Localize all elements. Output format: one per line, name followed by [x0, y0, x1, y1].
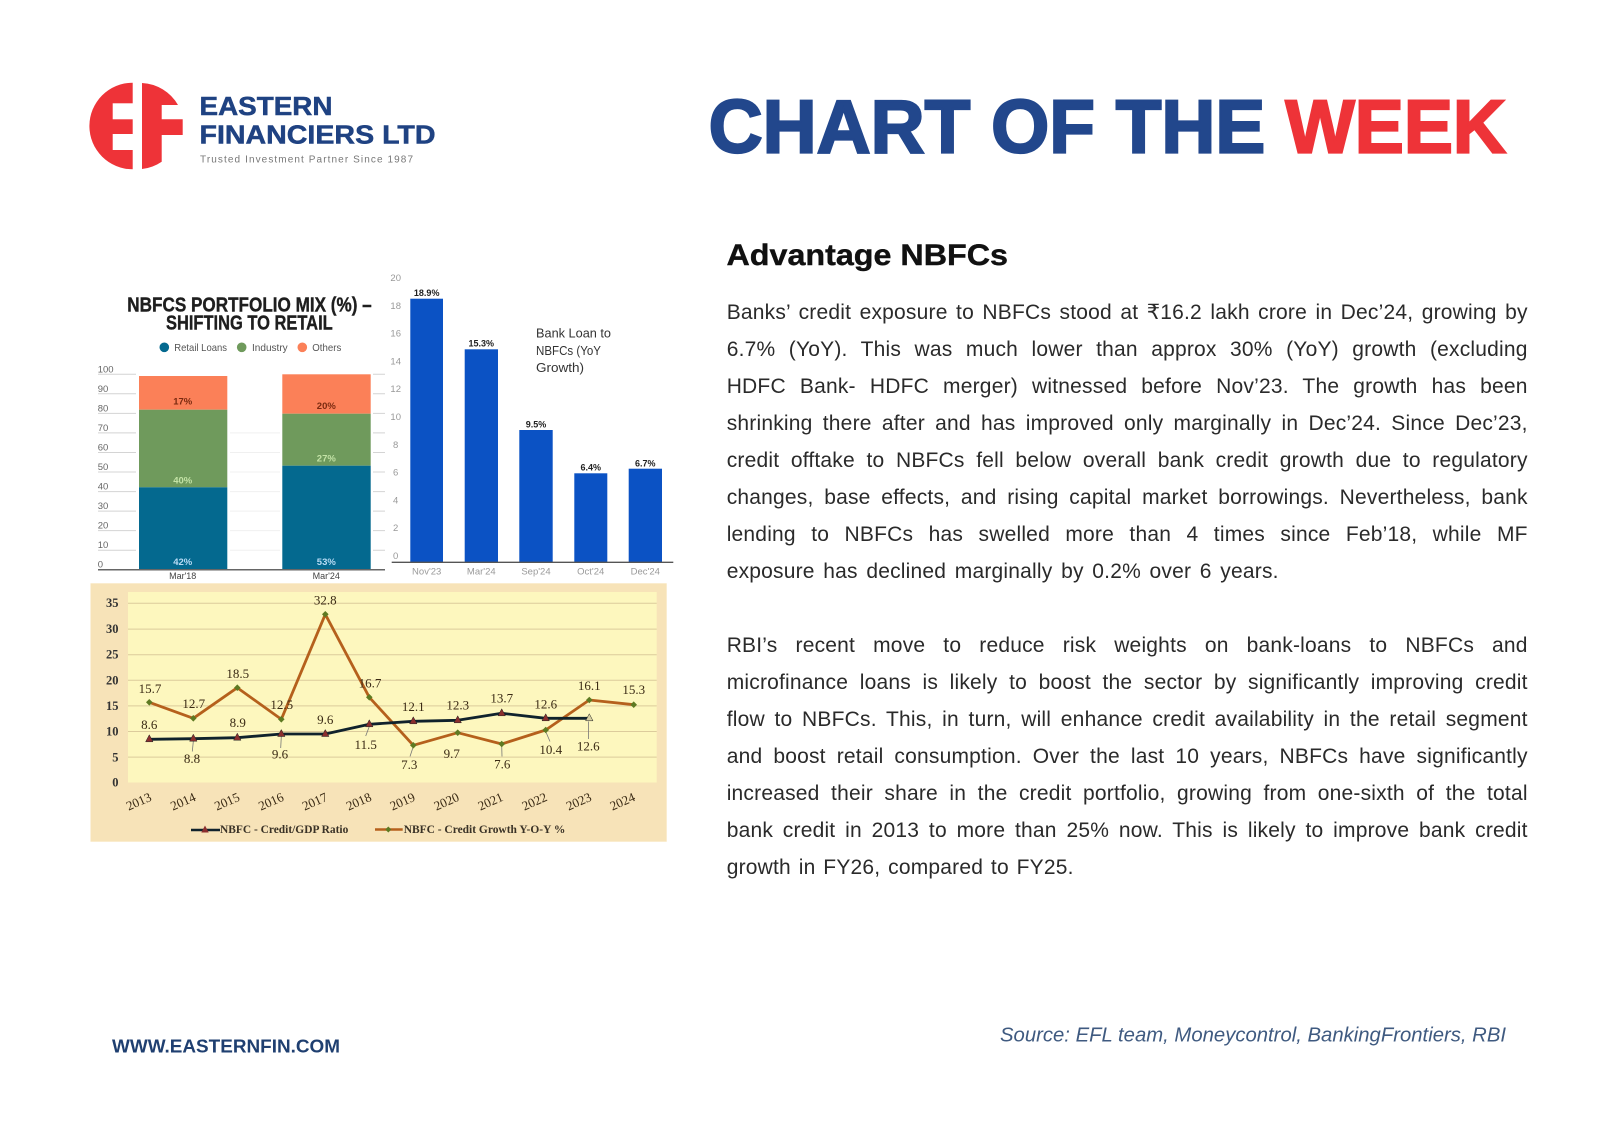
text block: first paragraph: changes, base effects, and rising capital market borrowings. Nevertheless, bank: [727, 486, 1528, 509]
logo wordmark: EASTERN: [200, 91, 332, 121]
chart: NBFC credit/GDP ratio and credit growth lines: [90, 583, 667, 842]
data labels: 8.8: [184, 751, 200, 766]
data labels: 12.6: [577, 738, 600, 754]
y axis labels: 30: [106, 622, 118, 636]
data labels: 8.9: [230, 715, 246, 730]
chart annotation: [536, 326, 611, 375]
bar value labels: 6.7%: [635, 458, 656, 468]
text block: second paragraph: [727, 634, 1528, 879]
logo wordmark: Trusted Investment Partner Since 1987: [200, 155, 413, 166]
footer: source: Source: EFL team, Moneycontrol, BankingFrontiers, RBI: [1000, 1025, 1506, 1047]
y axis labels: 2: [393, 523, 398, 534]
chart annotation: NBFCs (YoY: [536, 343, 601, 358]
bar: Mar'24: [282, 374, 371, 570]
title: Chart of the Week: WEEK: [1285, 84, 1506, 168]
data labels: 12.3: [446, 698, 469, 712]
bar: Mar'18: [139, 376, 227, 570]
y axis labels: 0: [98, 560, 103, 570]
y axis labels: 20: [390, 273, 401, 284]
y axis labels: 4: [393, 495, 398, 506]
y axis labels: 20: [98, 520, 108, 532]
bar: Mar'24: 53%: [317, 557, 336, 568]
year labels: 2024: [607, 789, 638, 814]
year labels: 2016: [256, 789, 286, 814]
year labels: 2015: [212, 789, 242, 814]
text block: second paragraph: microfinance loans is likely to boost the sector by significantly improving credit: [727, 671, 1528, 694]
text block: first paragraph: credit offtake to NBFCs fell below overall bank credit growth due to regulatory: [727, 449, 1528, 472]
data labels: 12.1: [402, 699, 425, 714]
y axis labels: 6: [393, 468, 398, 479]
bar: Mar'18: 40%: [173, 475, 193, 486]
y axis labels: 60: [98, 442, 108, 454]
y axis labels: 0: [393, 551, 398, 562]
x axis labels: Mar'18: [169, 571, 196, 581]
chart title: SHIFTING TO RETAIL: [166, 312, 333, 334]
y axis labels: 80: [98, 404, 108, 414]
bar value labels: 6.4%: [580, 463, 601, 473]
x axis labels: [412, 566, 660, 577]
bar value labels: 9.5%: [526, 419, 546, 429]
x axis labels: Sep'24: [521, 566, 551, 577]
text block: first paragraph: shrinking there after and has improved only marginally in Dec’24. Since Dec’23,: [727, 412, 1528, 435]
x axis labels: [169, 571, 340, 581]
year labels: 2023: [564, 789, 594, 814]
text block: first paragraph: lending to NBFCs has swelled more than 4 times since Feb’18, while MF: [727, 523, 1528, 546]
y axis labels: 100: [98, 364, 114, 376]
title: Chart of the Week: CHART OF THE: [709, 84, 1265, 168]
text block: second paragraph: and boost retail consumption. Over the last 10 years, NBFCs have significantly: [727, 745, 1528, 768]
y axis labels: [106, 596, 118, 790]
y axis labels: 8: [393, 440, 398, 451]
text block: second paragraph: flow to NBFCs. This, in turn, will enhance credit availability in the retail segment: [727, 708, 1528, 731]
y axis labels: 10: [106, 724, 118, 738]
year labels: 2020: [431, 789, 461, 814]
line: credit/GDP ratio: [146, 709, 593, 742]
data labels: 7.6: [494, 756, 511, 772]
data labels: 16.7: [359, 676, 382, 690]
year labels: 2013: [124, 789, 154, 814]
year labels: 2017: [300, 789, 330, 814]
y axis labels: 35: [106, 596, 118, 610]
legend: Industry: [252, 342, 288, 354]
year labels: 2014: [168, 789, 198, 814]
year labels: 2019: [387, 789, 417, 814]
x axis labels: Oct'24: [577, 566, 604, 577]
data labels: 9.6: [317, 712, 334, 727]
bar: Mar'24: 27%: [317, 454, 336, 465]
data labels: 8.6: [141, 717, 158, 732]
year labels: [124, 789, 638, 814]
data labels: 7.3: [401, 757, 417, 772]
logo: Eastern Financiers Ltd: [89, 83, 436, 169]
data labels: 32.8: [314, 592, 337, 608]
legend: [160, 342, 341, 354]
y axis labels: 40: [98, 482, 108, 492]
text block: second paragraph: bank credit in 2013 to more than 25% now. This is likely to improve bank credit: [727, 819, 1528, 842]
chart: bank loan to NBFCs YoY growth bars: [390, 273, 673, 577]
leader lines: [192, 722, 589, 756]
text block: first paragraph: exposure has declined marginally by 0.2% over 6 years.: [727, 560, 1279, 583]
data labels: [139, 592, 645, 772]
text block: second paragraph: increased their share in the credit portfolio, growing from one-sixth of the total: [727, 782, 1528, 805]
y axis labels: 12: [390, 384, 401, 395]
year labels: 2018: [344, 789, 374, 814]
bar value labels: 15.3%: [469, 339, 494, 349]
bar: Mar'18: 42%: [173, 557, 193, 568]
footer: website: WWW.EASTERNFIN.COM: [112, 1037, 340, 1057]
y axis labels: 10: [98, 540, 108, 551]
bar value labels: [414, 288, 656, 473]
x axis labels: Dec'24: [631, 566, 660, 577]
bars: [410, 299, 662, 562]
data labels: 15.7: [139, 681, 162, 696]
legend: NBFC - Credit Growth Y-O-Y %: [404, 822, 565, 836]
y axis labels: [390, 273, 401, 562]
logo wordmark: FINANCIERS LTD: [200, 119, 436, 149]
y axis labels: 70: [98, 423, 108, 434]
bar value labels: 18.9%: [414, 288, 439, 298]
text block: first paragraph: [727, 301, 1528, 583]
chart: NBFCs portfolio mix stacked bars: [98, 295, 385, 581]
text block: second paragraph: RBI’s recent move to reduce risk weights on bank-loans to NBFCs and: [727, 634, 1528, 657]
year labels: 2022: [519, 789, 549, 814]
y axis labels: 5: [112, 750, 118, 764]
legend: [191, 822, 565, 836]
data labels: 15.3: [622, 682, 645, 697]
data labels: 9.6: [272, 746, 289, 762]
x axis labels: Nov'23: [412, 566, 441, 577]
bar: Mar'24: 20%: [317, 401, 336, 412]
text block: first paragraph: Banks’ credit exposure to NBFCs stood at ₹16.2 lakh crore in Dec’24, growing by: [727, 301, 1528, 324]
heading: Advantage NBFCs: Advantage NBFCs: [726, 239, 1008, 272]
line: credit growth: [146, 611, 637, 749]
text block: first paragraph: HDFC Bank- HDFC merger) witnessed before Nov’23. The growth has been: [727, 375, 1528, 398]
y axis labels: 15: [106, 699, 118, 713]
y axis labels: 20: [106, 674, 118, 688]
chart title: NBFCS PORTFOLIO MIX (%) –: [127, 295, 372, 317]
bar: Mar'18: 17%: [173, 397, 193, 408]
logo wordmark: [200, 91, 436, 166]
y axis labels: 16: [390, 329, 401, 340]
y axis labels: 18: [390, 301, 401, 312]
y axis labels: 10: [390, 412, 401, 423]
data labels: 13.7: [490, 690, 514, 706]
year labels: 2021: [475, 789, 505, 814]
y axis labels: 0: [112, 776, 118, 790]
legend: Retail Loans: [174, 342, 227, 354]
data labels: 12.6: [534, 696, 558, 712]
text block: second paragraph: growth in FY26, compared to FY25.: [727, 856, 1074, 879]
y axis labels: [98, 364, 114, 570]
y axis labels: 30: [98, 501, 108, 512]
data labels: 12.7: [182, 696, 206, 711]
chart annotation: Growth): [536, 360, 584, 375]
chart annotation: Bank Loan to: [536, 326, 611, 341]
y axis labels: 90: [98, 384, 108, 395]
x axis labels: Mar'24: [313, 571, 340, 581]
chart title: [127, 295, 372, 334]
y axis labels: 50: [98, 462, 108, 473]
x axis labels: Mar'24: [467, 566, 496, 577]
y axis labels: 14: [390, 356, 401, 367]
icon: EF monogram: [89, 83, 183, 169]
legend: NBFC - Credit/GDP Ratio: [220, 822, 348, 836]
text block: first paragraph: 6.7% (YoY). This was much lower than approx 30% (YoY) growth (excluding: [727, 338, 1528, 361]
data labels: 11.5: [355, 737, 377, 752]
y axis labels: 25: [106, 648, 118, 662]
data labels: 18.5: [226, 666, 249, 681]
data labels: 12.5: [270, 697, 293, 712]
data labels: 9.7: [444, 746, 460, 761]
data labels: 16.1: [578, 678, 601, 693]
data labels: 10.4: [539, 742, 563, 757]
legend: Others: [312, 342, 341, 354]
